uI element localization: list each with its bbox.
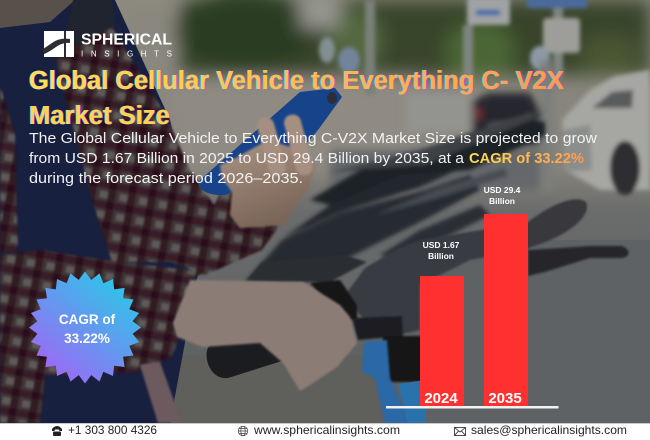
logo mark xyxy=(43,31,74,57)
cars xyxy=(330,60,554,190)
logo: INSIGHTS xyxy=(81,50,172,58)
bar 2035: 2035 xyxy=(488,390,522,407)
bar 2035: Billion xyxy=(489,196,515,206)
footer contact bar xyxy=(0,423,650,440)
icon: globe xyxy=(238,426,248,436)
title xyxy=(29,67,564,130)
bar chart xyxy=(386,185,558,408)
description paragraph xyxy=(29,130,597,187)
logo xyxy=(43,31,172,58)
bar 2024 xyxy=(420,240,464,407)
footer contact bar: sales@sphericalinsights.com xyxy=(471,423,627,437)
background photo: person in plaid shirt xyxy=(0,0,357,423)
description paragraph: during the forecast period 2026–2035. xyxy=(29,170,303,187)
CAGR badge: 33.22% xyxy=(64,331,110,346)
icon: envelope xyxy=(454,428,466,436)
CAGR badge: CAGR of xyxy=(59,312,116,327)
icon: telephone xyxy=(52,426,62,436)
title: Global Cellular Vehicle to Everything C- V2X xyxy=(29,67,564,95)
title: Market Size xyxy=(29,102,170,130)
bar 2035: USD 29.4 xyxy=(484,185,521,195)
CAGR badge xyxy=(29,272,141,384)
background photo: parked bike handlebars xyxy=(207,112,629,424)
bar 2024: USD 1.67 xyxy=(423,240,460,250)
bar 2035 xyxy=(484,185,528,407)
description paragraph: from USD 1.67 Billion in 2025 to USD 29.4 Billion by 2035, at a xyxy=(29,150,465,167)
signs and poles xyxy=(319,0,587,100)
trees xyxy=(120,0,650,170)
logo: SPHERICAL xyxy=(81,32,172,48)
upper hand holding phone xyxy=(220,113,316,228)
bar 2024: 2024 xyxy=(424,390,458,407)
background photo: smartphone xyxy=(199,88,342,228)
footer contact bar: +1 303 800 4326 xyxy=(68,423,157,437)
bar 2024: Billion xyxy=(428,251,454,261)
bike grip xyxy=(207,335,320,378)
lower hand xyxy=(173,280,357,391)
footer contact bar: www.sphericalinsights.com xyxy=(253,423,400,437)
description paragraph: The Global Cellular Vehicle to Everything C-V2X Market Size is projected to grow xyxy=(29,130,597,147)
front handlebar and brake xyxy=(247,199,629,382)
description paragraph: CAGR of 33.22% xyxy=(469,150,584,167)
